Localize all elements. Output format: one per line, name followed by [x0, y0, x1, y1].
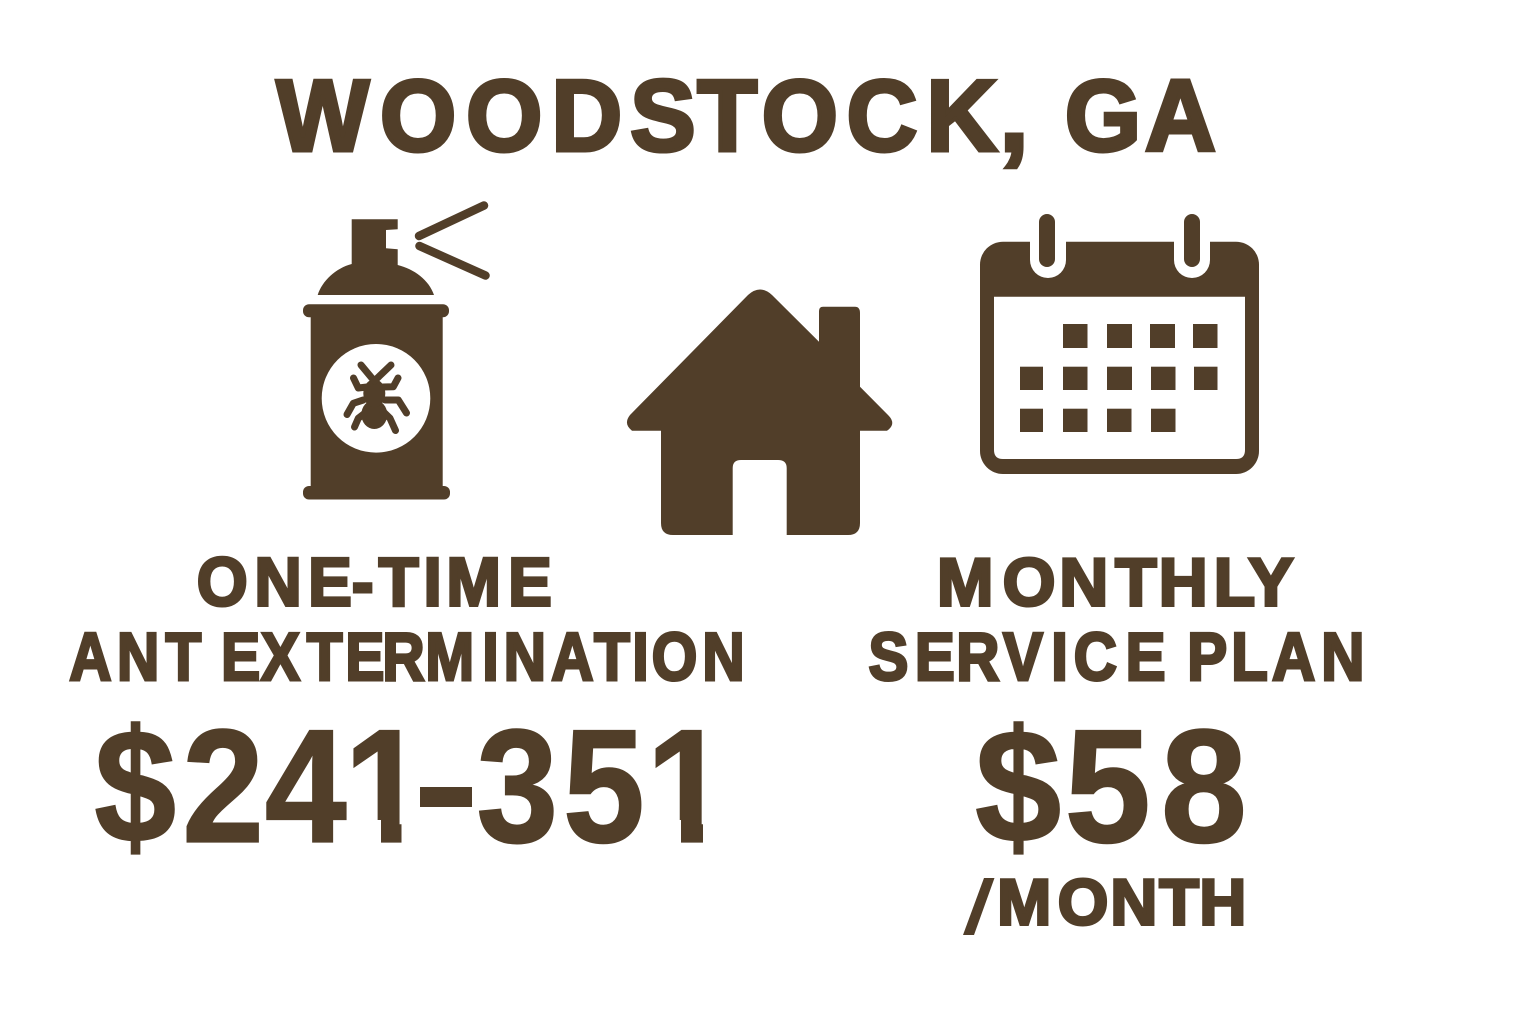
heading: monthly service plan: MONTHLY — [937, 544, 1294, 620]
icon: spray can — [303, 206, 486, 500]
nozzle and dome — [318, 219, 434, 295]
calendar frame — [980, 242, 1259, 474]
icon: house — [627, 290, 892, 535]
icon: calendar — [980, 214, 1259, 474]
heading: monthly service plan — [868, 544, 1364, 695]
can body with bug label — [303, 304, 450, 500]
icon: bug — [347, 365, 406, 430]
calendar page — [994, 297, 1245, 459]
price: one-time: $241-351 — [94, 696, 728, 876]
spray lines — [419, 206, 486, 276]
heading: one-time ant extermination — [69, 544, 745, 695]
binder rings — [1030, 214, 1210, 278]
heading: one-time ant extermination: ONE-TIME — [197, 544, 552, 621]
price: monthly: $58 — [975, 697, 1247, 876]
heading: one-time ant extermination: ANT EXTERMINATION — [69, 620, 745, 695]
date squares — [1020, 324, 1218, 432]
heading: monthly service plan: SERVICE PLAN — [868, 619, 1364, 695]
title: WOODSTOCK, GA — [276, 53, 1216, 174]
